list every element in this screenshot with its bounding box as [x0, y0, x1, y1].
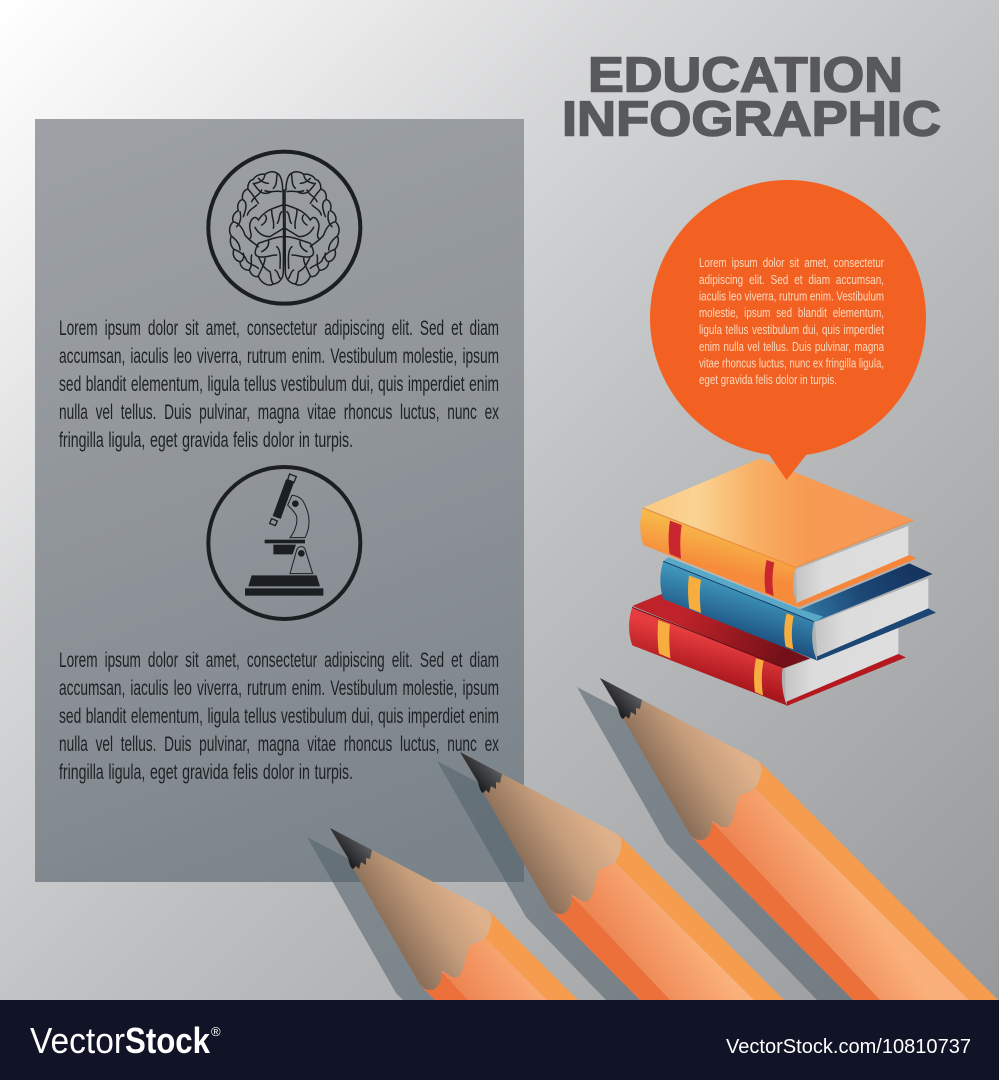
title: EDUCATION — [588, 48, 903, 102]
text block: bubble text: vitae rhoncus luctus, nunc ex fringilla ligula, — [699, 356, 884, 370]
footer: watermark bar — [0, 1000, 999, 1080]
text block: second paragraph: accumsan, iaculis leo viverra, rutrum enim. Vestibulum molestie, ipsum — [59, 677, 499, 700]
text block: bubble text — [699, 256, 884, 387]
pencil: right — [577, 678, 998, 1000]
pencil: left — [307, 828, 578, 1000]
text block: second paragraph — [59, 649, 499, 784]
text block: first paragraph: nulla vel tellus. Duis pulvinar, magna vitae rhoncus luctus, nunc ex — [59, 401, 499, 424]
logo: VectorStock — [30, 1020, 221, 1061]
logo: VectorStock: ® — [211, 1024, 221, 1039]
icon: brain in circle — [208, 152, 360, 304]
text: image id: VectorStock.com/10810737 — [726, 1036, 971, 1058]
icon: microscope in circle — [208, 467, 360, 619]
text block: first paragraph: accumsan, iaculis leo viverra, rutrum enim. Vestibulum molestie, ipsum — [59, 345, 499, 368]
title — [562, 48, 941, 146]
title: INFOGRAPHIC — [562, 92, 941, 146]
panel: grey text panel — [35, 119, 524, 882]
callout: orange speech bubble — [650, 180, 926, 480]
pencil: middle — [437, 752, 784, 1000]
text block: second paragraph: sed blandit elementum, ligula tellus vestibulum dui, quis imperdiet enim — [59, 705, 499, 728]
text block: bubble text: iaculis leo viverra, rutrum enim. Vestibulum — [699, 290, 884, 304]
logo: VectorStock: Stock — [125, 1020, 211, 1061]
icon: book stack — [629, 458, 936, 706]
text block: first paragraph: sed blandit elementum, ligula tellus vestibulum dui, quis imperdiet enim — [59, 373, 499, 396]
orange book — [640, 458, 917, 607]
text block: second paragraph: Lorem ipsum dolor sit amet, consectetur adipiscing elit. Sed et diam — [59, 649, 499, 672]
text block: bubble text: Lorem ipsum dolor sit amet, consectetur — [699, 256, 884, 270]
text block: bubble text: molestie, ipsum sed blandit elementum, — [699, 306, 884, 320]
text block: second paragraph: nulla vel tellus. Duis pulvinar, magna vitae rhoncus luctus, nunc ex — [59, 733, 499, 756]
text block: bubble text: enim nulla vel tellus. Duis pulvinar, magna — [699, 340, 884, 354]
text block: bubble text: eget gravida felis dolor in turpis. — [699, 373, 837, 387]
red book — [629, 594, 906, 706]
text block: bubble text: adipiscing elit. Sed et diam accumsan, — [699, 273, 884, 287]
text block: first paragraph: fringilla ligula, eget gravida felis dolor in turpis. — [59, 429, 353, 452]
logo: VectorStock: Vector — [30, 1020, 125, 1061]
text block: second paragraph: fringilla ligula, eget gravida felis dolor in turpis. — [59, 761, 353, 784]
text block: first paragraph: Lorem ipsum dolor sit amet, consectetur adipiscing elit. Sed et diam — [59, 317, 499, 340]
text block: first paragraph — [59, 317, 499, 452]
blue book — [660, 557, 936, 661]
text block: bubble text: ligula tellus vestibulum dui, quis imperdiet — [699, 323, 884, 337]
